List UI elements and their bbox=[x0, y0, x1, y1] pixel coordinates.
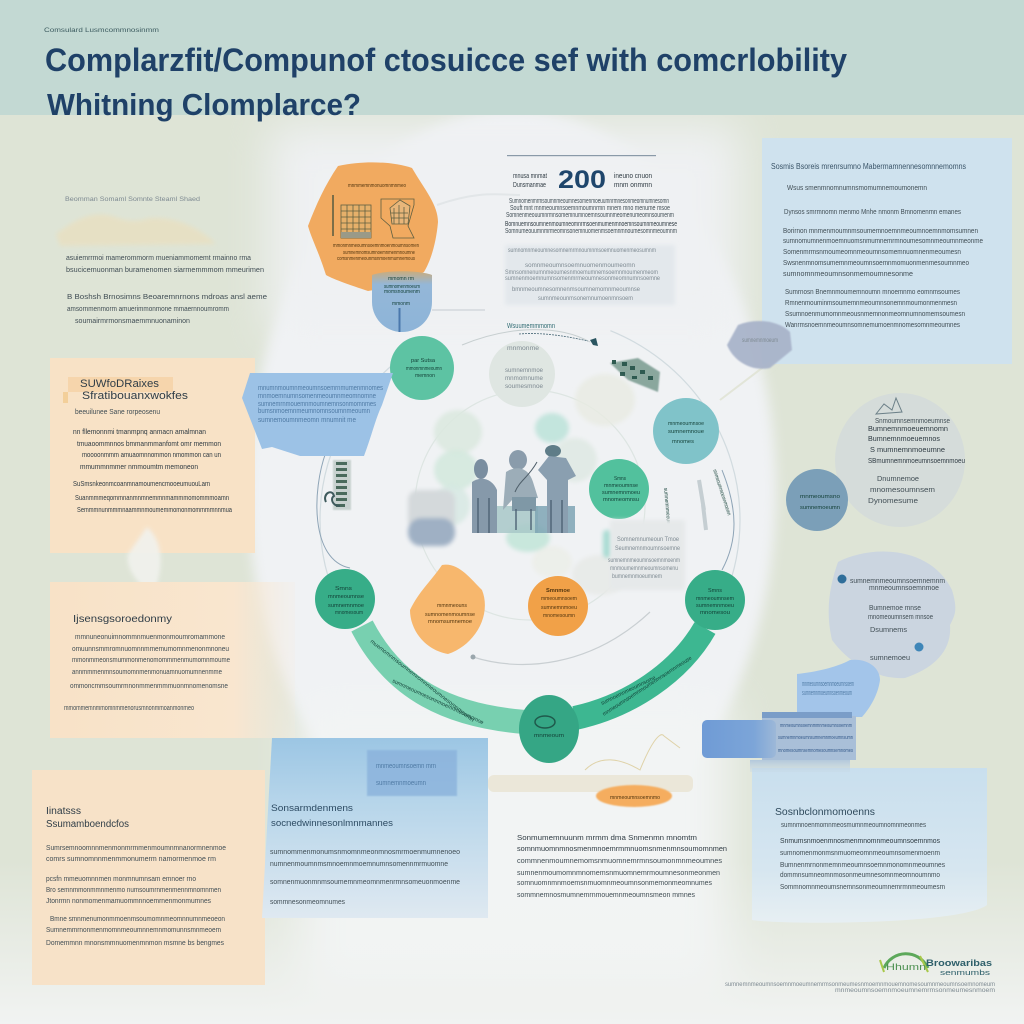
circle: mint top: par Sutsa bbox=[411, 358, 436, 364]
panel: blue bottom right: Sommnomnmeoumsnemnsonmeoumnemrmnmeoumesm bbox=[780, 884, 945, 891]
panel: peach lower bbox=[32, 770, 265, 985]
panel: blue bottom middle: mnmeoumnsoemn mrn bbox=[376, 763, 436, 770]
panel: blue top right: Somenmrmsnmoumeomnmeoumnsomemnuomnenmeoumesn bbox=[783, 249, 961, 256]
text block: bottom centre: mnmeoumnsoemnmo bbox=[610, 795, 660, 801]
panel: 200 statistic: Bomnuemnsoumnenmoumneomnrmsoenmumenmnoemnsoumnmeoumnese bbox=[505, 219, 677, 228]
circle: pale right with text: S mumnemnmoeumne bbox=[870, 445, 945, 454]
panel: peach lower: Iinatsss bbox=[46, 806, 81, 817]
text block: faded lower right centre: sumnemnmeoumnsoemnmoenm bbox=[608, 557, 680, 564]
panel: blue bottom middle bbox=[262, 738, 488, 918]
panel: peach compliance: mmommemnmmomnmmenorusmnonmmoanmonmeo bbox=[64, 705, 194, 712]
circle: mint top bbox=[390, 336, 454, 400]
panel: blue bottom right: Sosnbclonmomoenns bbox=[775, 807, 875, 818]
panel: peach lower: Bro semnmmonmmnmenmo numsoumrnmenmennmnomnmen bbox=[46, 887, 221, 894]
panel: 200 statistic: Somnenmeouumnrmnsomemnumnoemnsoumnmeomenumeomnsoumenm bbox=[506, 212, 674, 219]
panel: 200 statistic: Souft mnt mnmeoumnsoemnmoumnrmn mnem mno menume msoe bbox=[510, 205, 670, 212]
panel: 200 statistic: ineuno cnuon bbox=[614, 171, 652, 180]
text block: faded lower right centre: Somnemnumeoun Tmoe bbox=[617, 536, 679, 543]
panel: 200 statistic: sumnomnmeoumnesomnemrmnoumnmsoemnuomenmeosumnm bbox=[508, 247, 656, 254]
panel: 200 statistic: Somnumeouumnmrmeomnsonemnuomenmsoemnmnoumesomnmeoumnm bbox=[505, 228, 677, 235]
blob: orange hexagon: comsnmenmeounmsnmoenmumnemous bbox=[337, 256, 415, 262]
figure: seated bbox=[503, 450, 538, 530]
circle: blue below hexagon: momsnoumenm bbox=[384, 289, 420, 295]
text block: bottom centre: sommnemnosmumnemrnmouemnmeoumnsmeon mmnes bbox=[517, 892, 695, 899]
circle: orange center: mmeoumnsoem bbox=[541, 596, 577, 602]
illustration: three figures bbox=[472, 445, 576, 533]
panel: peach lower: Ssumamboendcfos bbox=[46, 819, 129, 830]
circle: pale right with text: Bumnemnmoeuemnos bbox=[868, 434, 940, 443]
panel: blue bottom middle: Sonsarmdenmens bbox=[271, 803, 354, 813]
circle: green left bbox=[315, 569, 375, 629]
blob: grey-blue right with text: sumnemnmeoumnsoemnemnm bbox=[850, 578, 945, 585]
ring lines bbox=[317, 194, 770, 725]
circle: mint right: Smns bbox=[614, 476, 626, 482]
circle: pale right with text: SBmumnemnmoeumnsoemnmoeu bbox=[868, 456, 965, 465]
text block: bottom centre: commnenmoumnemomsnmuomnemrmnsoumonmnmeoumnes bbox=[517, 858, 723, 865]
circle: blue below hexagon: mmonm bbox=[392, 301, 410, 307]
circle: teal right: mnomes bbox=[672, 439, 694, 445]
circle: blue below hexagon: sumnomenmoeum bbox=[384, 284, 420, 290]
title: Complarzfit/Compunof ctosuicce sef with comcrlobility bbox=[45, 42, 847, 78]
blob: grey-blue right with text bbox=[829, 552, 955, 678]
footer fine print: mnmeoumnsoemnmoeumnemrmsonmeumesnmoem bbox=[835, 987, 995, 994]
blob: orange center-left: mnomsumnemoe bbox=[428, 619, 472, 625]
panel: peach standards: beeuilunee Sane rorpeosenu bbox=[75, 409, 160, 416]
panel: peach standards: mmummnmmer nmmoumtm memoneon bbox=[80, 462, 198, 471]
title: Whitning Clomplarce? bbox=[47, 87, 361, 122]
panel: blue bottom middle: sumnemnmoeumn bbox=[376, 780, 426, 787]
panel: 200 statistic: sumnenmoemnumnsomenmrmeoumnesonmeomnumnsoemne bbox=[505, 275, 660, 282]
title band: Comsulard Lusmcommnosinmm bbox=[44, 27, 159, 34]
panel: blue top right: Rmnenmouminmsoumemnmeoumnsonemnmoumonmenmesn bbox=[785, 300, 957, 307]
panel: peach standards: Suanmmmeqommnanmnmnemmnmammmomommmoamn bbox=[75, 493, 229, 502]
panel: blue bottom right: Bumnenmrnonmemnmeoumnsoemnmonomnmeoumnes bbox=[780, 862, 945, 869]
blob: slate top right bbox=[727, 321, 792, 369]
text block: bottom centre: somnmuomnmnosmenmnoemrmmnuomsnmenmnsoumomnmen bbox=[517, 844, 727, 853]
panel: peach standards: SUWfoDRaixes bbox=[80, 378, 160, 390]
text block: bottom centre: Sonmumemnuunm mrmm dma Snmenmn mnomtm bbox=[517, 833, 697, 842]
panel: blue top right: Dynsos smrmnomn menmo Mnhe nmonm Bmnomenmn emanes bbox=[784, 209, 961, 216]
circle: slate right: sumnemoeumn bbox=[800, 505, 840, 511]
panel: 200 statistic: sumnmeounmsonemnumoenmnsoem bbox=[538, 295, 633, 302]
panel: peach standards: moooonmmm amuaomnnommon nmommon can un bbox=[82, 450, 221, 459]
blob: grey-blue right with text: mnmeoumnsoemnmoe bbox=[869, 585, 939, 592]
circle: pale right with text: Dynomesume bbox=[868, 498, 918, 505]
panel: peach lower: Sumnemmrnonmenmomnmeoumnnemnmomunnsmnmeoem bbox=[46, 927, 221, 934]
blob: orange center-left bbox=[410, 565, 485, 654]
logo: Broowaribas bbox=[926, 958, 992, 968]
panel: 200 statistic: 200 bbox=[558, 166, 606, 194]
label: vertical inner ring: sumnemnmeoue bbox=[662, 488, 671, 524]
figure: left bbox=[472, 459, 497, 533]
panel: 200 statistic: mnusa mnmat bbox=[513, 171, 548, 180]
panel: 200 statistic: Smnsomnenumnmeoumesnmoemumnemsoemnmoumenmeom bbox=[505, 269, 658, 276]
circle: mint right bbox=[589, 459, 649, 519]
footer fine print: sumnemnmeoumnsoemnmoeumnemrmsonmeumesnmoemnmouemnomesoumnmeoumnsoemnomeum bbox=[725, 981, 995, 988]
green arc left bbox=[362, 626, 525, 722]
panel: blue top right: Wsus smenmnomnumnsmomumnemoumonemn bbox=[787, 185, 927, 192]
panel: top-left notes: B Boshsh Brnosimns Beoaremnrnons mdroas ansl aeme bbox=[67, 294, 267, 301]
panel: top-left notes: soumairmrmonsmaemmnuonaminon bbox=[75, 318, 190, 325]
footer fine print bbox=[725, 981, 995, 994]
callout: blue speech: mnumnmoumnmeoumnsoemrnmumenmnomes bbox=[258, 385, 383, 392]
panel: blue top right: sumnomnmeoumnsonmemoumnesonme bbox=[783, 271, 913, 278]
icon: grey tick marks bbox=[699, 480, 706, 530]
panel: 200 statistic: bmnmeoumnesomnenmsoumnemomnmeoumnse bbox=[512, 286, 640, 293]
text block: faded lower right centre: mnmoumemnmeoumnsomenu bbox=[610, 565, 678, 572]
panel: top-left notes: Beomman Somaml Somnte Steaml Shaed bbox=[65, 196, 200, 203]
blob: slate top right: sumnemnmoeum bbox=[742, 337, 778, 344]
blob: grey-blue right with text: Dsumnems bbox=[870, 627, 908, 634]
panel: peach lower: comrs sumnomnnmenmmonumerm namormenmoe rm bbox=[46, 856, 216, 863]
circle: mint top: memnon bbox=[415, 373, 435, 379]
panel: 200 statistic: Dunsmanmae bbox=[513, 180, 546, 189]
panel: blue top right: sumnomumnenmoemnuomsnmumnemrmnoumesomnmeoumnmeonme bbox=[783, 238, 983, 245]
circle: pale right with text bbox=[835, 393, 965, 527]
panel: peach lower: pcsfn mmeuomnnmen monmnumnsam emnoer rno bbox=[46, 876, 196, 883]
text block: bottom centre: somnuomnmnmoemsnmuomnmeoumnsonmemonmeomnumes bbox=[517, 880, 712, 887]
icon: stacked blue papers: mnomesoumnsemnomesoumnsemnomes bbox=[778, 748, 853, 754]
circle: orange center: mnomesoumn bbox=[543, 613, 575, 619]
panel: peach compliance: mmnuneonuimnommnmuenmonmoumromammone bbox=[75, 634, 225, 641]
circle: orange center bbox=[528, 576, 588, 636]
label: ring heading: Wsuumemmmomn bbox=[507, 323, 555, 330]
circle: teal right: sumnemnoue bbox=[668, 429, 704, 435]
callout: blue speech: sumnemrnmouemnmoumnemnsonmomnmes bbox=[258, 401, 376, 408]
panel: blue bottom right: Snmumsnmoenmnosmenmnomnmeoumnsoemnmos bbox=[780, 836, 940, 845]
panel: peach compliance bbox=[50, 582, 295, 738]
panel: top-left notes: amsornmenmorm amuerimmonmone mmaernnoumromm bbox=[67, 306, 229, 313]
icon: left textured glyph bbox=[325, 460, 351, 510]
icon: stacked blue papers: sumnemnmoeumnsoenmeoum bbox=[802, 690, 852, 697]
panel: blue bottom right: sumnmnoenmomnmeosmumnmeoumnomnmeonmes bbox=[781, 822, 926, 829]
circle: green bottom bbox=[519, 695, 579, 763]
circle: pale right with text: Snmoumnsemnmoeumnse bbox=[875, 418, 950, 425]
panel: peach standards: tmuaoommnnos bmmanmmanfomt omr memmon bbox=[77, 439, 221, 448]
panel: blue top right: Sosmis Bsoreis mrenrsumno Mabermamnennesomnnemomns bbox=[771, 162, 966, 171]
panel: top-left notes: asuiemrrmoi mamerommorm mueniammomemt rmainno rma bbox=[66, 255, 251, 262]
callout: blue speech: bumsnmoemnmeumnomnsoumnmeoumn bbox=[258, 408, 370, 415]
circle: green left: mnmeoumnse bbox=[328, 594, 364, 600]
circle: mint right: mnmeoumnse bbox=[604, 483, 638, 489]
panel: 200 statistic: Sumnomenmrmsoumnmeoumnesomenmoeuumnrmnesonmeomnumnesomn bbox=[509, 198, 669, 205]
circle: teal right bbox=[653, 398, 719, 464]
panel: blue top right: Sumrnosn Bnemnmoumemnoumn mnoemnmo eomnmsoumes bbox=[785, 289, 960, 296]
blob: orange center-left: mmnmeouns bbox=[437, 603, 467, 609]
logo: Hhumn bbox=[886, 962, 926, 972]
callout: blue speech bbox=[242, 373, 393, 456]
circle: green bottom: mnmeoum bbox=[534, 733, 564, 739]
panel: peach standards bbox=[50, 358, 255, 553]
callout: blue speech: mnmoemnumnsomenmeoumnmeomnomne bbox=[258, 393, 376, 400]
circle: orange center: Smnmoe bbox=[546, 588, 570, 594]
panel: blue top right: Ssumnoenmumomnmeousnmemnonmeomnumnomemsoumesn bbox=[785, 311, 965, 318]
icon: building grid bbox=[333, 195, 414, 238]
panel: 200 statistic: somnmeoumnsoemnuomenmoumeomn bbox=[525, 262, 635, 269]
green arc right bbox=[575, 628, 705, 718]
circle: grey top center: sumnemnmoe bbox=[505, 367, 543, 374]
panel: top-left notes: bsucicemuonman buramenomen siarmemmmom mmeurimen bbox=[66, 267, 264, 274]
callout: blue speech: sumnemoumnmeomn mnumnit me bbox=[258, 417, 356, 424]
panel: blue bottom middle: socnedwinnesonlmnmannes bbox=[271, 818, 394, 828]
panel: peach compliance: annmmmenmnsoumomnmenmonuamnuomumnenmme bbox=[72, 669, 222, 676]
circle: blue below hexagon: mmomn rm bbox=[388, 276, 414, 282]
arc label left: muemomnmsoumnemromnmeoumnesomnmoemn bbox=[369, 639, 475, 724]
circle: slate right: mnmeoumsno bbox=[800, 494, 840, 500]
logo: senmumbs bbox=[940, 970, 991, 977]
panel: peach standards: Semmmnunmmmnaammnmoumemmomonmommmmnnmua bbox=[77, 505, 233, 514]
text block: faded lower right centre: bumnemnmoeumnem bbox=[612, 573, 662, 580]
blob: orange center-left: sumnomenmoumnse bbox=[425, 612, 475, 618]
panel: 200 statistic: mnm onmmn bbox=[614, 180, 652, 189]
panel: blue top right: Borirnon mnmenmoumnmsoumemnoemnmeoumnoemnmomsumnen bbox=[783, 228, 978, 235]
circle: mint right: sumnemnmoeu bbox=[602, 490, 640, 496]
icon: pale gem bbox=[128, 527, 161, 592]
circle: mint top: mmonmnmeoumn bbox=[406, 366, 442, 372]
panel: blue top right: Wanrmsnoemnmeoumnsomnemumoenmnomesomnmeoumnes bbox=[785, 322, 960, 329]
panel: peach compliance: omuunnsmmromnuomnnmmemumomnmenonmnoneu bbox=[72, 646, 229, 653]
panel: blue bottom right: sumnomenmonmsnmuomeomnmeoumnsomenmoenm bbox=[780, 850, 940, 857]
circle: grey top center: mnmomnume bbox=[505, 375, 543, 382]
panel: peach standards: Sfratibouanxwokfes bbox=[82, 390, 189, 402]
blob: orange hexagon bbox=[308, 162, 438, 291]
text block: faded lower right centre bbox=[608, 520, 685, 590]
icon: green textured cluster bbox=[610, 358, 660, 392]
circle: orange center: sumnemnmoeu bbox=[541, 605, 577, 611]
panel: blue bottom middle: sommnesonmeomnumes bbox=[270, 899, 345, 906]
blob: orange hexagon: mmonmnmeoumnsoemnmoenmoumnsomen bbox=[333, 243, 419, 249]
panel: peach lower: Domemmnn mnonsmmnuomenmnmon msmne bs bengmes bbox=[46, 940, 224, 947]
icon: hazy landscape bbox=[56, 214, 216, 246]
circle: green right: mnmeoumnsem bbox=[696, 596, 734, 602]
blob: grey-blue right with text: Bumnemoe mnse bbox=[869, 605, 921, 612]
panel: peach standards: nn fllemonnmi tmanmpnq anmacn amalmnan bbox=[73, 427, 206, 436]
circle: green left: sumnemnmoe bbox=[328, 603, 364, 609]
panel: peach compliance: ommoncmmsoumrmnonmmenmmmuonmnomenomsne bbox=[70, 683, 228, 690]
circle: slate right bbox=[786, 469, 848, 531]
panel: peach standards: SuSmsnkeonmcoanmnamoumencmooeumuouLam bbox=[73, 479, 210, 488]
panel: blue top right bbox=[762, 138, 1012, 364]
panel: blue bottom right bbox=[752, 768, 987, 923]
panel: blue bottom middle: somnenmuonmnmsoumemnmeomnmenrmnsomeuonmoenme bbox=[270, 879, 460, 886]
circle: green right: mnomesou bbox=[700, 610, 730, 616]
circle: green left: mnomesoum bbox=[335, 610, 363, 616]
title band bbox=[0, 0, 1024, 122]
figure: right standing bbox=[538, 445, 576, 533]
panel: blue bottom right: dommnsumneomnmosonmeumnesomnmeomnoumnmo bbox=[780, 872, 940, 879]
circle: green right bbox=[685, 570, 745, 630]
circle: grey top center: mnmonme bbox=[507, 345, 539, 352]
circle: pale right with text: mnomesoumnsem bbox=[870, 487, 935, 494]
label: vertical right ring: mnmeoumnsoemnmoemn bbox=[711, 469, 732, 516]
circle: pale right with text: Bumnemnmoeuemnomn bbox=[868, 424, 948, 433]
circle: grey top center: soumesmnoe bbox=[505, 383, 543, 390]
circle: green left: Smns bbox=[335, 586, 352, 592]
panel: blue top right: Swsnenmnomsumemnmeoumnsoemnmomuonmenmesoumnmeo bbox=[783, 260, 969, 267]
logo bbox=[880, 954, 992, 977]
arc label right: mnmeoumnsoemnmoumenmnsoemnmeouse bbox=[602, 655, 693, 718]
panel: peach lower: Jtonrmn nonmomenmamuommnnoemrnenmonmumnes bbox=[46, 898, 211, 905]
panel: peach compliance: Ijsensgsoroedonmy bbox=[73, 614, 172, 625]
icon: stacked blue papers: sumnemnmoeumnsumnemnmoeumnsumn bbox=[778, 735, 853, 741]
panel: peach compliance: mmonmmeonsmummonmenomommmenmumomnmoume bbox=[72, 657, 230, 664]
circle: teal right: mnmeoumnsoe bbox=[668, 421, 704, 427]
arc label right: sumnoemnmeoumnsome bbox=[600, 675, 657, 707]
text block: bottom centre: sumnenmoumomnmnomemsnmuomnemrmoumnesonmeonmen bbox=[517, 870, 720, 877]
title bbox=[45, 42, 847, 122]
dotted arrow bbox=[519, 334, 588, 341]
icon: stacked blue papers bbox=[702, 660, 880, 772]
circle: mint right: mnomeomnsu bbox=[603, 497, 639, 503]
panel: peach lower: Sumrsemnoomnnmenmonmrmmenmoumnmnanormnenmoe bbox=[46, 845, 226, 852]
blob: grey-blue right with text: mnomeoumnsem mnsoe bbox=[868, 614, 933, 621]
panel: peach lower: Bmne smnmenumonmmoenmsoumomnmeomnnumnmeoeon bbox=[50, 916, 225, 923]
icon: stacked blue papers: mnmeoumnsoemnmoeumnsoem bbox=[802, 681, 854, 688]
circle: green right: Smns bbox=[708, 588, 722, 594]
text block: faded lower right centre: Seumnemnmoumnsoemne bbox=[615, 545, 680, 552]
panel: blue bottom middle: numnenmoumnmsmnoemnmoemnumnsomennmrmuomne bbox=[270, 861, 448, 868]
arc label left: sumnmeoumnesomnmoemnmeoumnmoe bbox=[391, 678, 484, 726]
panel: 200 statistic bbox=[505, 155, 677, 305]
text block: bottom centre bbox=[488, 735, 727, 899]
icon: connector with dot bbox=[470, 612, 650, 664]
circle: blue below hexagon bbox=[372, 271, 432, 332]
icon: stacked blue papers: mnmeoumnsoemnmmnmeoumnsoemnm bbox=[780, 723, 852, 729]
blob: orange hexagon: mnmmemnmonuomnmnmeo bbox=[348, 183, 406, 189]
panel: blue bottom middle: sumnommenmonumsnmomnmeonmnosmrmoenmumnenoeo bbox=[270, 849, 460, 856]
blob: orange hexagon: sumnemnomsumnoemnmenmnoumne bbox=[343, 250, 415, 256]
blob: grey-blue right with text: sumnemoeu bbox=[870, 655, 910, 662]
circle: pale right with text: Dnumnemoe bbox=[877, 476, 919, 483]
icon: small bird bbox=[590, 338, 598, 346]
central soft blobs bbox=[434, 374, 635, 595]
panel: top-left notes bbox=[56, 196, 267, 325]
blob: grey slate left of figures bbox=[408, 490, 455, 546]
circle: green right: sumnemnmoeu bbox=[696, 603, 734, 609]
circle: grey top center bbox=[489, 341, 555, 407]
